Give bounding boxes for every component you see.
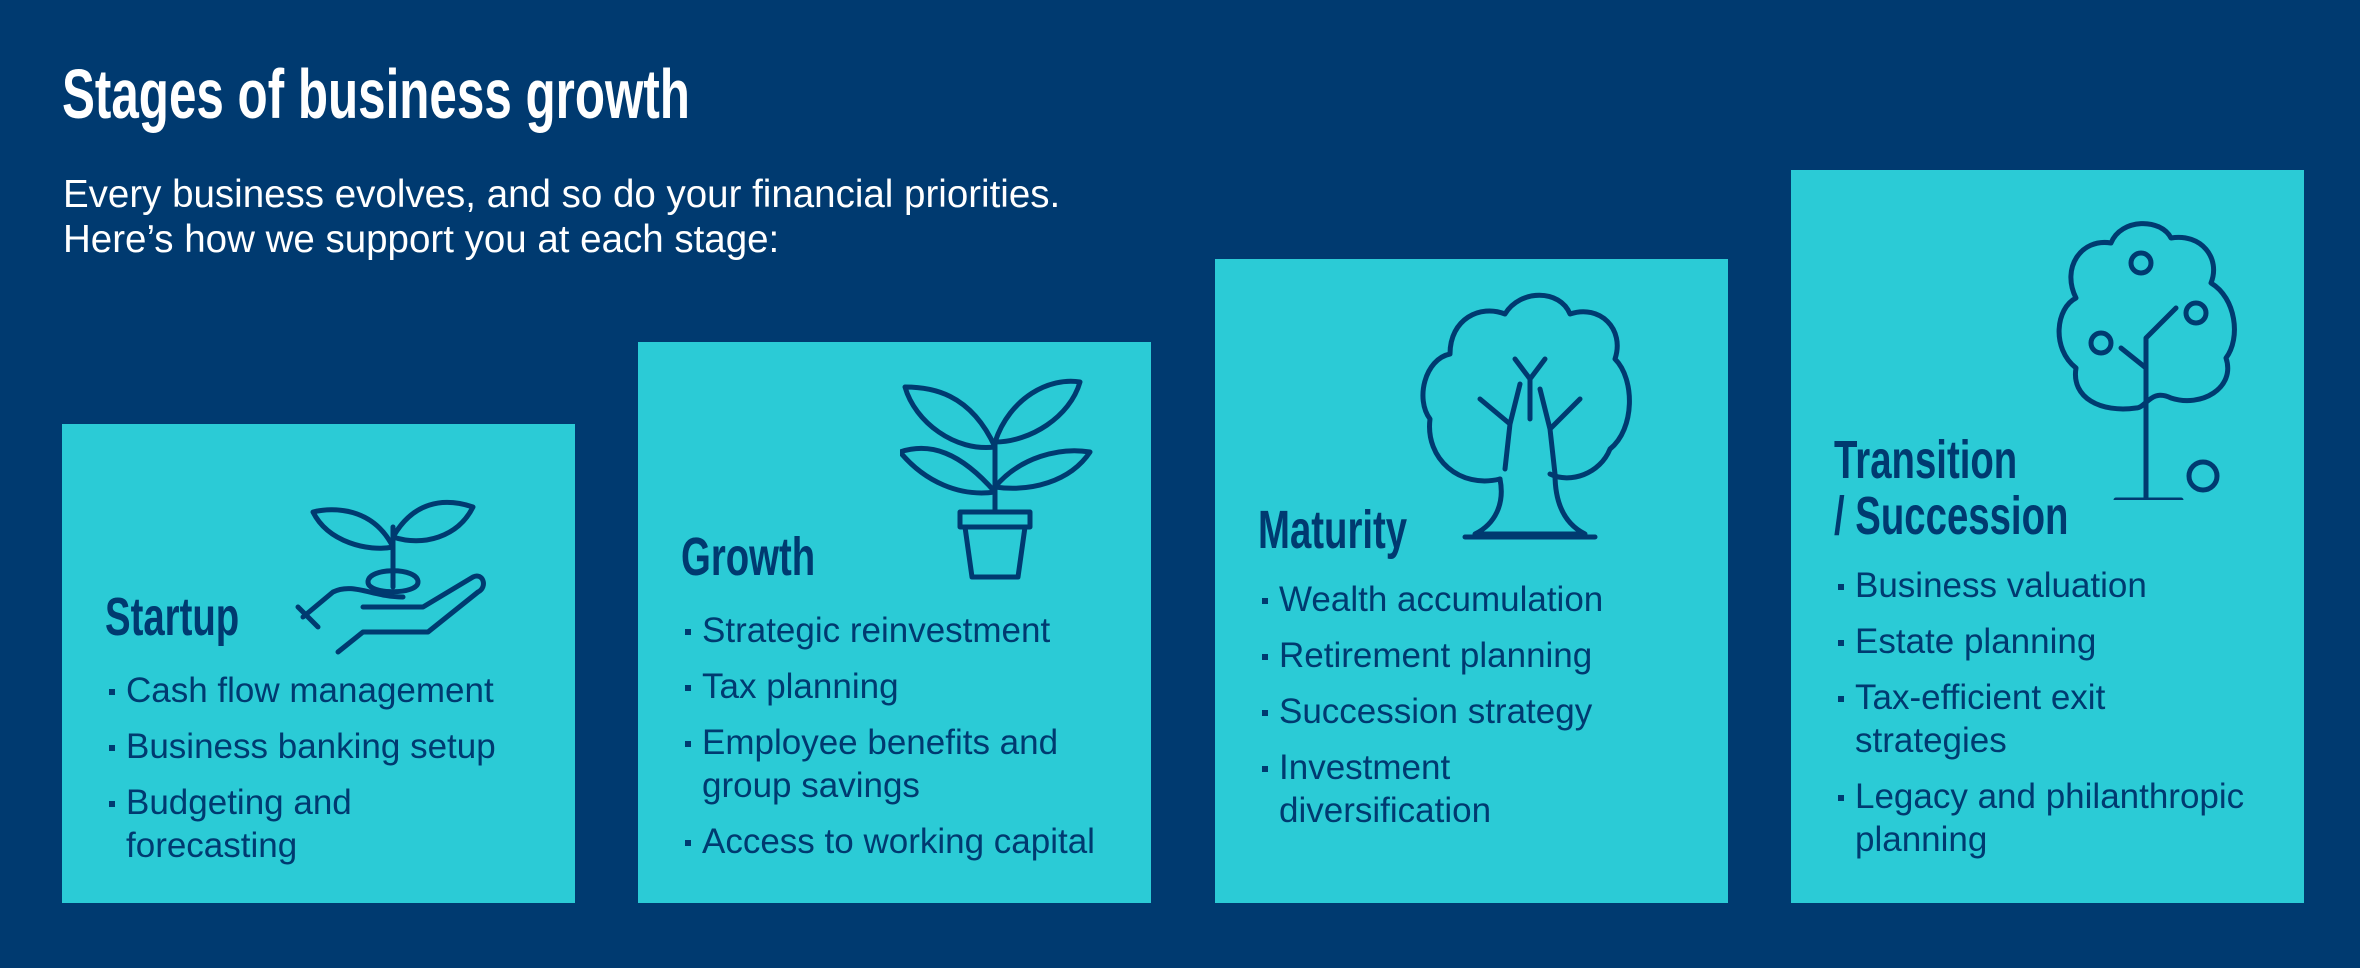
list: growth: Access to working capital: [702, 822, 1095, 861]
list: transition: [1838, 566, 2244, 859]
list: maturity: [1262, 580, 1603, 830]
list: transition: Tax-efficient exit: [1855, 678, 2105, 717]
list: transition: strategies: [1855, 721, 2007, 760]
list: growth: [685, 611, 1095, 861]
panel: maturity: [1215, 259, 1728, 903]
list: startup: [109, 671, 496, 865]
panel: transition: [1791, 170, 2304, 903]
list: growth: Strategic reinvestment: [702, 611, 1050, 650]
list: startup: Budgeting and: [126, 783, 352, 822]
heading: transition / succession: [1834, 430, 2068, 546]
title: Stages of business growth: [62, 55, 690, 133]
list: transition: Legacy and philanthropic: [1855, 777, 2244, 816]
heading: transition / succession: / Succession: [1834, 486, 2068, 546]
list: growth: group savings: [702, 766, 920, 805]
icon: potted plant: [900, 378, 1092, 580]
heading: startup: Startup: [105, 587, 239, 647]
panel: startup: [62, 424, 575, 903]
icon: tree: [1420, 292, 1632, 540]
list: transition: Business valuation: [1855, 566, 2147, 605]
list: growth: Tax planning: [702, 667, 899, 706]
subtitle: [63, 173, 1060, 261]
list: startup: forecasting: [126, 826, 297, 865]
list: transition: Estate planning: [1855, 622, 2096, 661]
heading: maturity: Maturity: [1258, 500, 1407, 560]
icon: apple tree: [2056, 221, 2237, 500]
subtitle: Here’s how we support you at each stage:: [63, 218, 779, 261]
list: maturity: Wealth accumulation: [1279, 580, 1603, 619]
list: startup: Cash flow management: [126, 671, 494, 710]
list: startup: Business banking setup: [126, 727, 496, 766]
panel: growth: [638, 342, 1151, 903]
list: maturity: diversification: [1279, 791, 1491, 830]
list: maturity: Investment: [1279, 748, 1450, 787]
heading: transition / succession: Transition: [1834, 430, 2017, 490]
subtitle: Every business evolves, and so do your financial priorities.: [63, 173, 1060, 216]
heading: growth: Growth: [681, 527, 815, 587]
list: maturity: Retirement planning: [1279, 636, 1592, 675]
list: growth: Employee benefits and: [702, 723, 1058, 762]
list: maturity: Succession strategy: [1279, 692, 1592, 731]
list: transition: planning: [1855, 820, 1987, 859]
icon: hand with sprout: [296, 500, 486, 654]
